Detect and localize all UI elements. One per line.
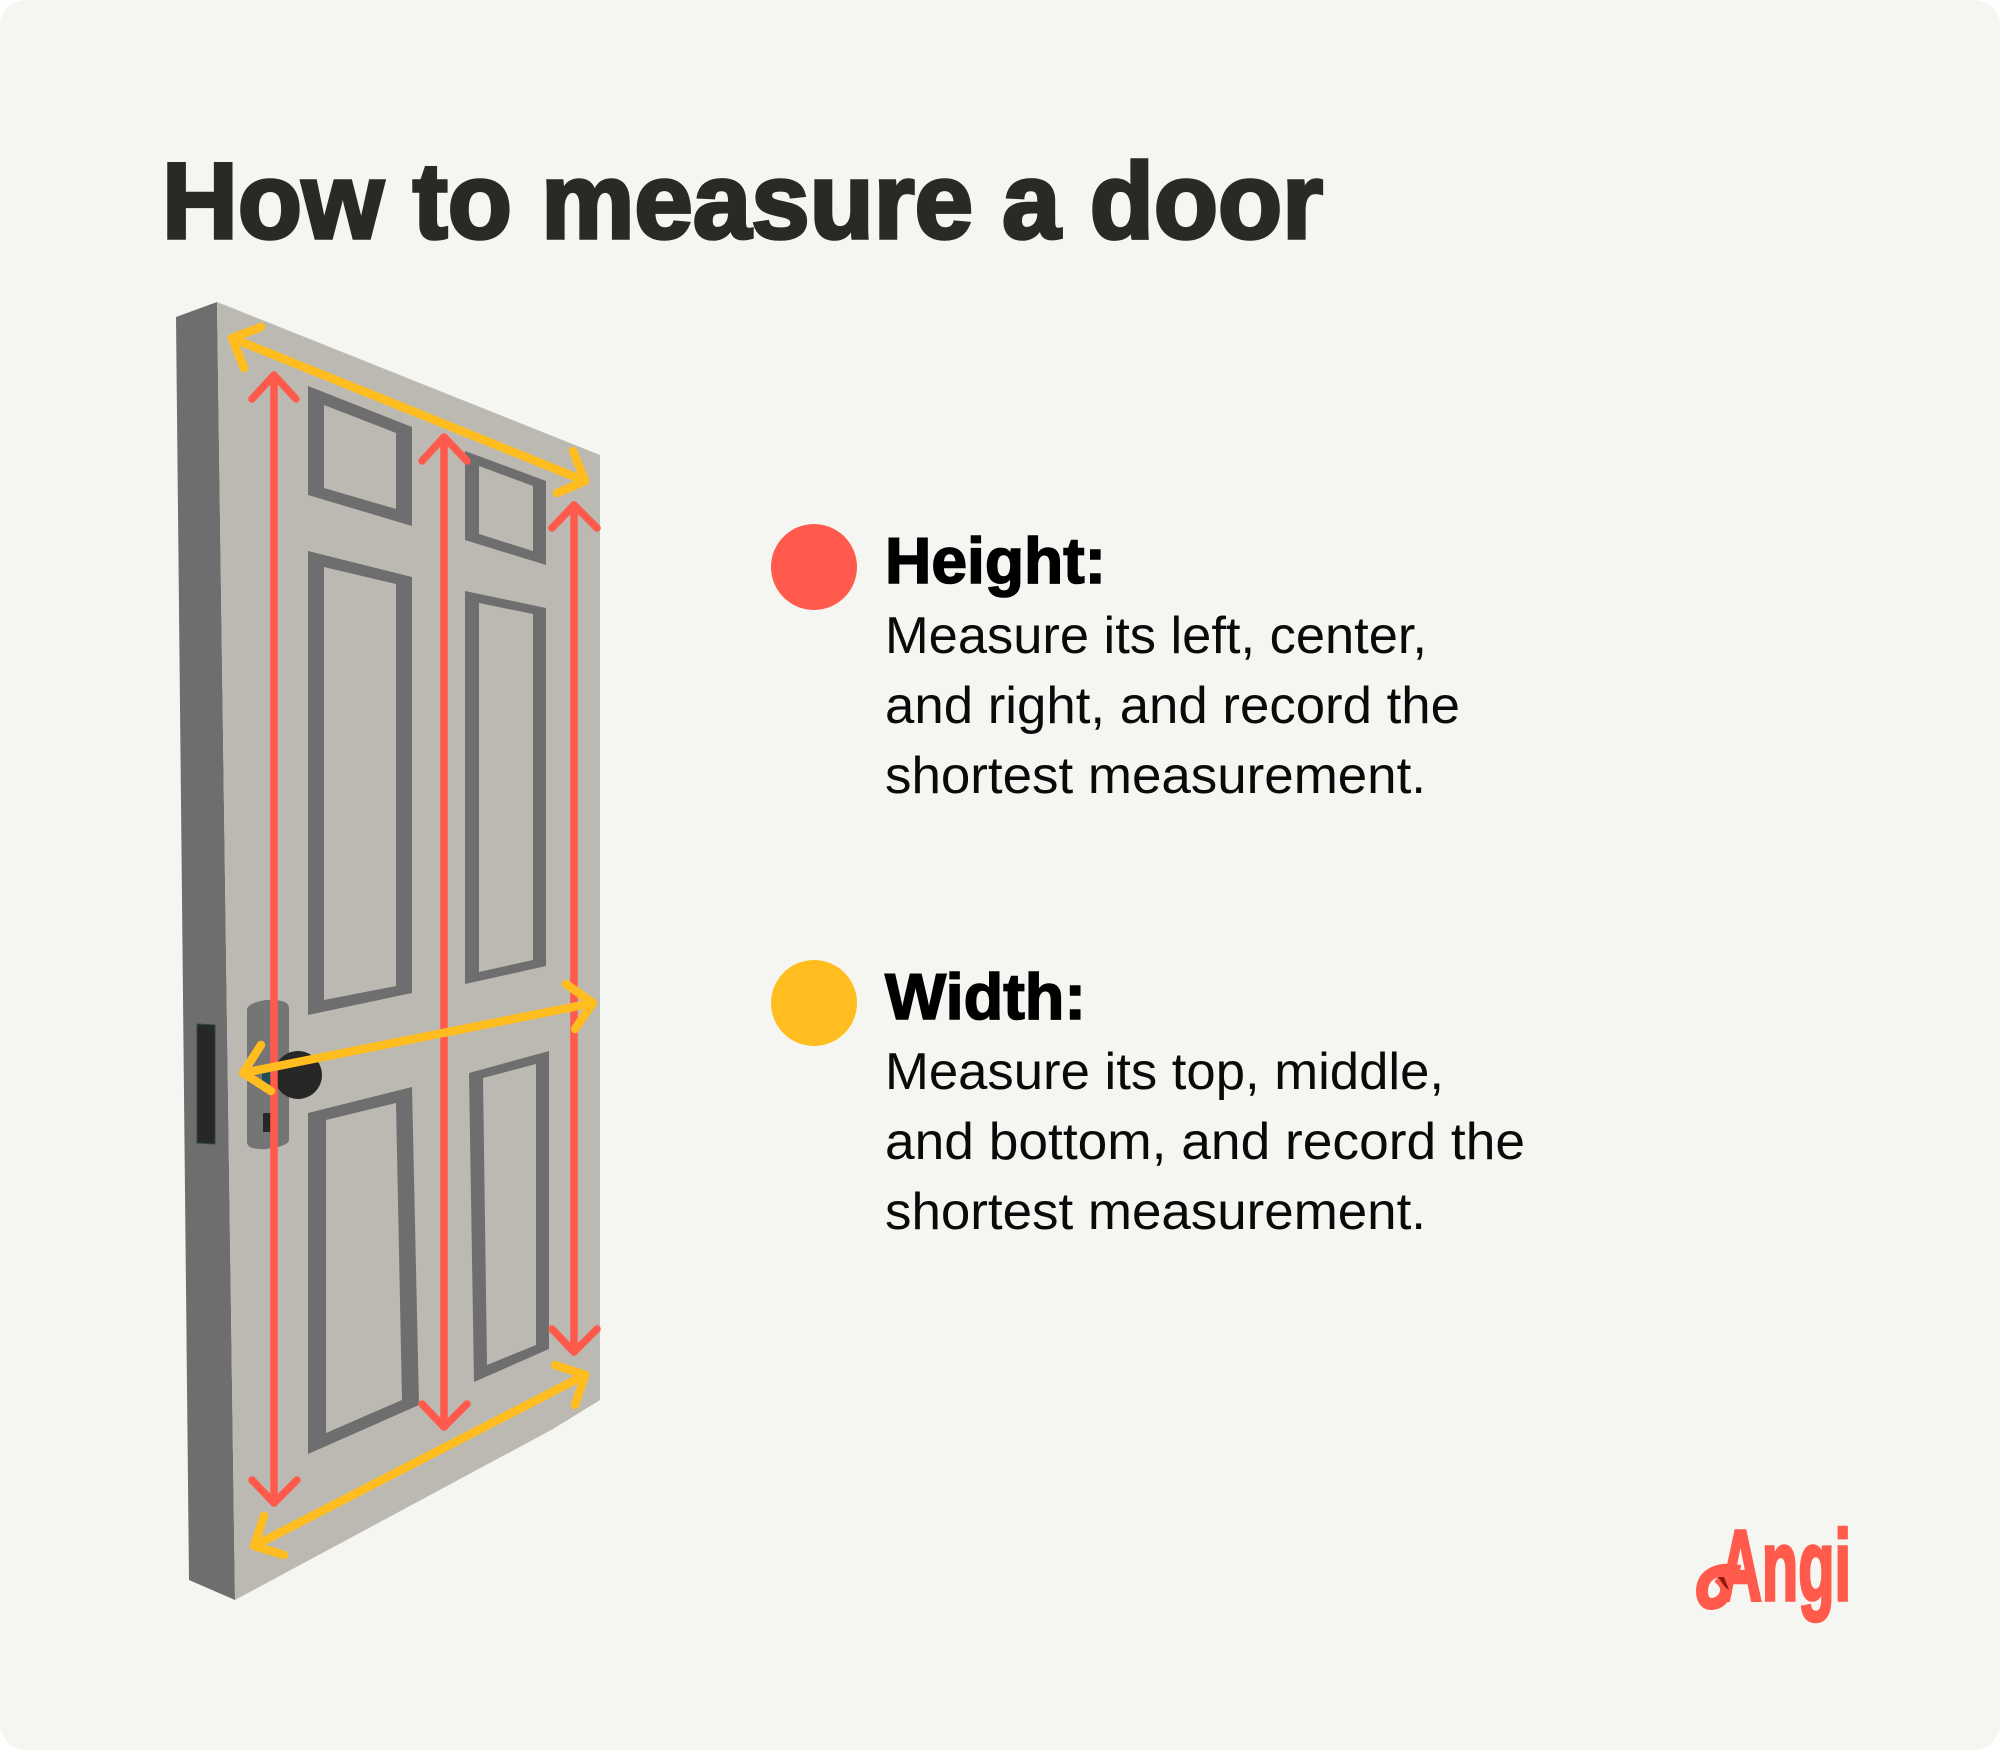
door latch plate: [197, 1024, 215, 1144]
door side edge: [176, 302, 235, 1600]
width description: shortest measurement.: [885, 1183, 1426, 1241]
width description: [885, 1043, 1525, 1241]
height description: Measure its left, center,: [885, 607, 1427, 665]
panel: upper left: [308, 386, 412, 526]
panel: lower left: [308, 1087, 419, 1454]
logo loop: [1702, 1570, 1740, 1604]
door illustration: [176, 302, 600, 1600]
legend: height: [771, 524, 1460, 805]
arrow: right height: [552, 505, 597, 1352]
panel: upper right: [465, 451, 546, 565]
width colour dot: [771, 960, 857, 1046]
width description: and bottom, and record the: [885, 1113, 1525, 1171]
knob shadow: [262, 1066, 274, 1086]
legend: width: [771, 960, 1525, 1241]
arrow: bottom width: [254, 1365, 585, 1555]
lock plate: [247, 1000, 289, 1149]
logo wordmark: Angi: [1719, 1510, 1851, 1622]
door front face: [217, 302, 600, 1600]
panel: middle right: [465, 591, 546, 984]
title: How to measure a door: [162, 140, 1323, 261]
height description: shortest measurement.: [885, 747, 1426, 805]
logo loop fold: [1718, 1577, 1729, 1590]
height heading: Height:: [885, 524, 1106, 597]
keyhole: [263, 1113, 272, 1132]
width description: Measure its top, middle,: [885, 1043, 1444, 1101]
arrow: center height: [422, 437, 467, 1427]
logo: Angi: [1702, 1510, 1851, 1622]
height colour dot: [771, 524, 857, 610]
arrow: middle width: [243, 984, 593, 1091]
arrow: left height: [252, 375, 297, 1503]
panel: middle left: [308, 551, 412, 1015]
width heading: Width:: [885, 960, 1086, 1033]
door knob: [274, 1051, 322, 1099]
panel: lower right: [469, 1051, 549, 1382]
height description: and right, and record the: [885, 677, 1460, 735]
arrow: top width: [232, 327, 585, 493]
height description: [885, 607, 1460, 805]
